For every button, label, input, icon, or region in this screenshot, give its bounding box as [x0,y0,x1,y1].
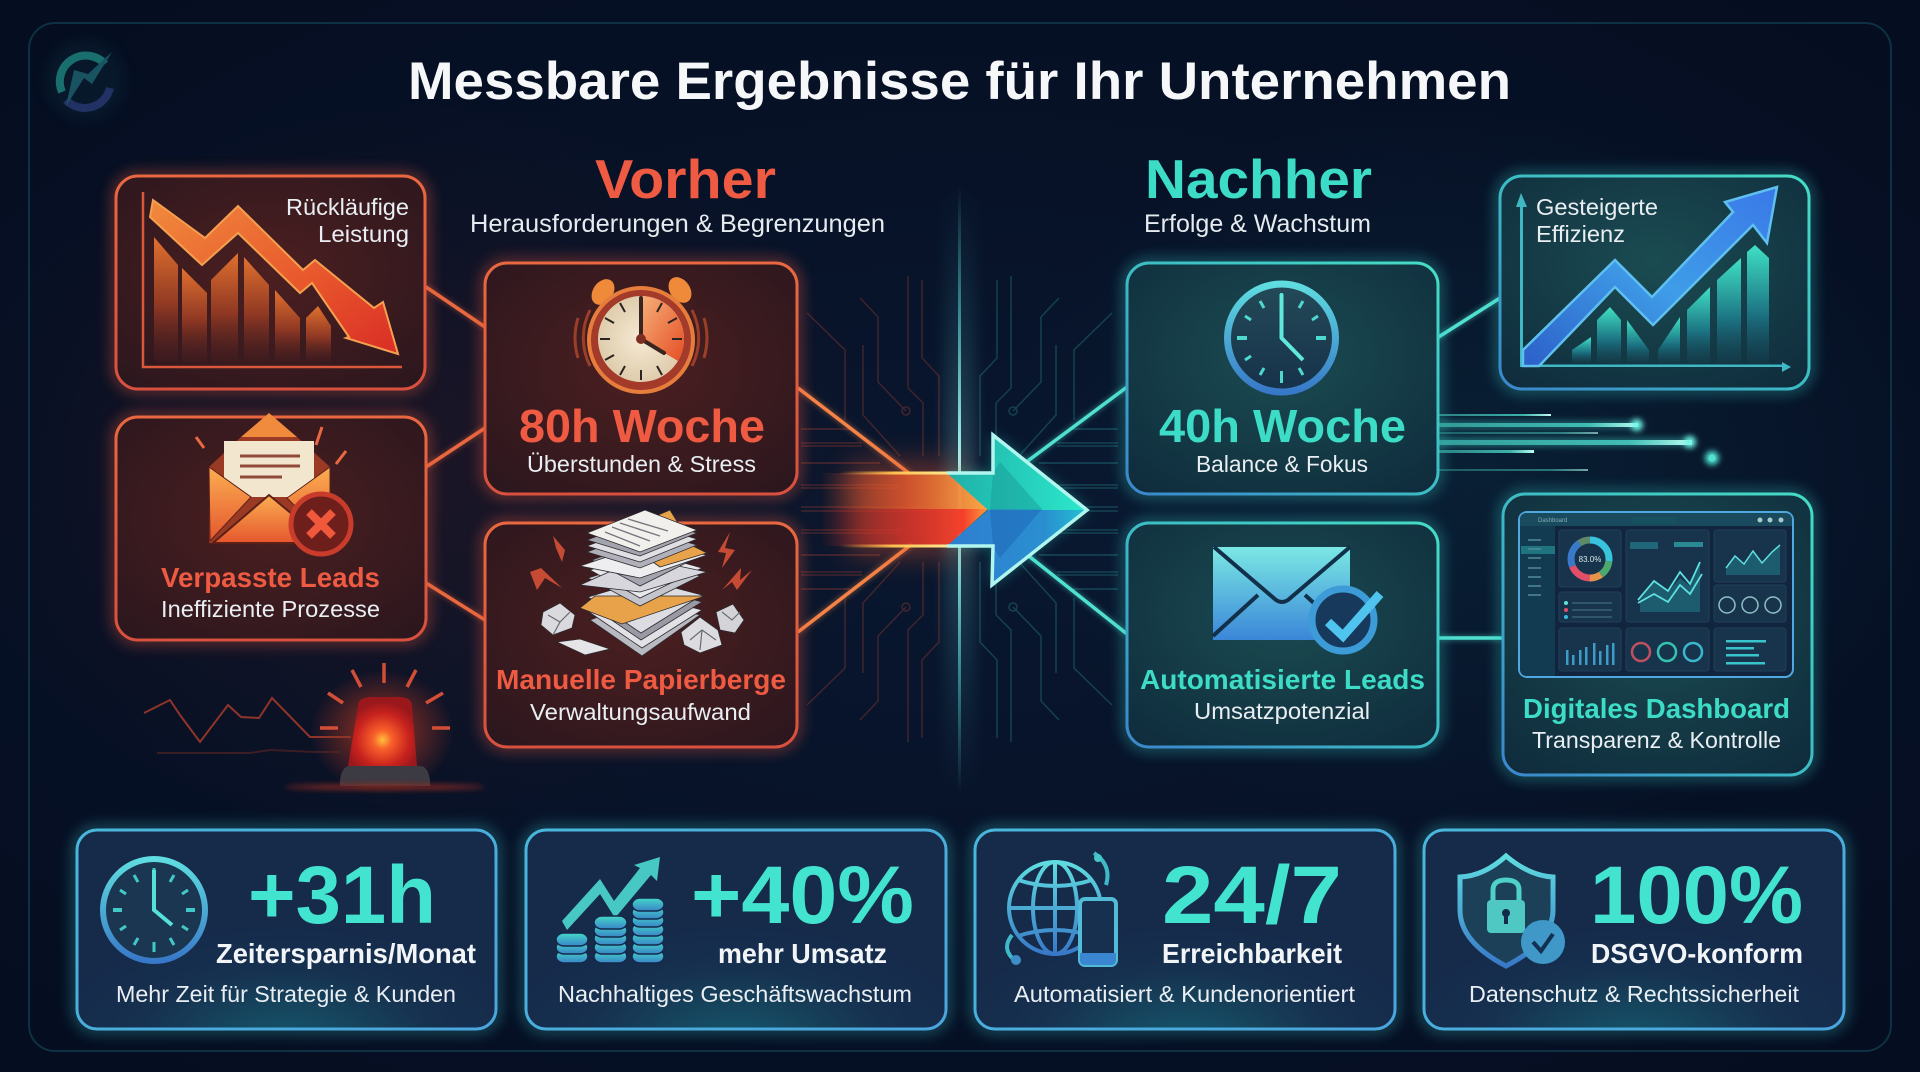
item title: Manuelle Papierberge [496,664,786,695]
value: +31h [248,850,436,941]
donut chart [1571,540,1609,578]
panel label [1536,194,1658,247]
caption: Verwaltungsaufwand [530,699,751,725]
title: Messbare Ergebnisse für Ihr Unternehmen [408,52,1511,111]
stat value: 80h Woche [519,400,765,452]
icon: clock [1228,284,1336,392]
panel: Gesteigerte Effizienz [1500,176,1809,389]
heading: Vorher: Herausforderungen & Begrenzungen [470,210,885,238]
caption: Balance & Fokus [1196,451,1368,477]
dashboard screen mockup: Dashboard [1538,518,1567,524]
heading: Vorher [470,148,885,238]
connector lines: after [1025,298,1502,638]
icon: coins with trend arrow [556,857,664,963]
center divider line [945,186,975,794]
line chart [1640,563,1700,612]
description: Nachhaltiges Geschäftswachstum [558,981,912,1007]
icon: envelope with error badge [196,413,351,554]
beacon base [340,766,430,786]
logo icon [45,40,125,120]
speed lines [1438,414,1719,471]
stat card: Zeitersparnis [77,830,496,1029]
background glow: before side [0,100,900,840]
panel: 40h Woche [1127,263,1438,494]
after half [947,435,1087,510]
connector lines: before [426,287,912,632]
heading: Nachher: Nachher [1145,148,1372,210]
rising bars [1572,245,1769,363]
panel: Digitales Dashboard [1503,494,1812,775]
circuit traces: after side [980,276,1118,742]
description: Automatisiert & Kundenorientiert [1014,981,1356,1007]
panel label: Rückläufige [286,194,409,220]
heading: Vorher: Vorher [595,148,776,210]
alarm siren with pulse line [144,663,485,794]
bar chart [1566,643,1614,665]
before half [820,472,988,548]
caption: Überstunden & Stress [527,451,756,477]
arrow glow [947,435,1087,585]
metric label: Zeitersparnis/Monat [216,938,476,969]
small line chart [1726,545,1780,575]
dashboard screen mockup [1519,512,1793,677]
stat card: Erreichbarkeit [975,830,1395,1029]
circuit traces: before side [801,276,939,742]
rising arrow [1523,187,1777,366]
panel label: Effizienz [1536,221,1625,247]
panel: 80h Woche [485,263,797,494]
declining bars [154,237,331,362]
panel: Automatisierte Leads [1127,523,1438,747]
caption: Transparenz & Kontrolle [1532,727,1781,753]
item title: Digitales Dashboard [1523,693,1790,724]
central arrow [820,435,1087,585]
pulse line [144,698,351,742]
panel: Rückläufige Leistung [116,176,425,389]
panel label: Leistung [318,221,409,247]
falling arrow [150,200,398,354]
caption: Umsatzpotenzial [1194,698,1370,724]
icon: shield with lock [1460,856,1565,966]
metric label: Erreichbarkeit [1162,938,1342,969]
description: Mehr Zeit für Strategie & Kunden [116,981,456,1007]
chart axes [1516,193,1791,372]
dashboard screen mockup: 83.0% [1579,555,1601,564]
value: +40% [691,850,914,941]
beacon dome [348,697,417,766]
icon: envelope with check badge [1213,547,1380,651]
chart axes [143,192,402,367]
icon: globe with phone [1007,853,1116,965]
panel: Verpasste Leads [116,413,426,640]
icon: alarm clock [575,273,707,392]
gauges [1719,597,1781,613]
background glow: after side [1000,100,1920,840]
metric label: mehr Umsatz [718,938,887,969]
list rows [1564,601,1612,619]
value: 100% [1590,850,1803,941]
stat value: 40h Woche [1159,400,1406,452]
icon: paper stack [530,510,752,656]
heading: Nachher [1144,148,1372,238]
panel: Manuelle Papierberge [485,510,797,747]
stat card: DSGVO-konform [1424,830,1844,1029]
panel label: Gesteigerte [1536,194,1658,220]
item title: Automatisierte Leads [1140,664,1425,695]
caption: Ineffiziente Prozesse [161,596,380,622]
item title: Verpasste Leads [161,562,380,593]
heading: Nachher: Erfolge & Wachstum [1144,210,1371,238]
stat card: mehr Umsatz [526,830,946,1029]
value: 24/7 [1162,850,1342,941]
panel label [286,194,409,247]
icon: clock [103,859,205,961]
metric label: DSGVO-konform [1591,938,1803,969]
description: Datenschutz & Rechtssicherheit [1469,981,1800,1007]
progress bars [1726,640,1766,664]
